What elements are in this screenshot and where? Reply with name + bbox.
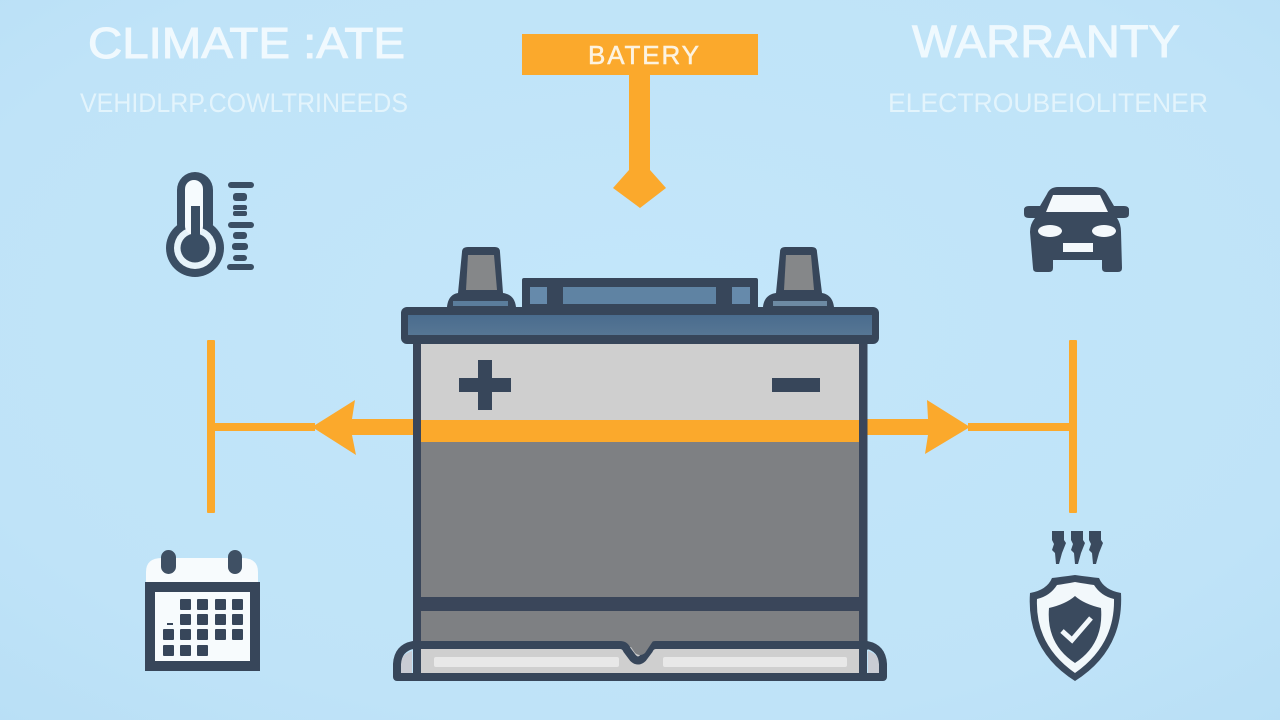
right connector arrow: [865, 340, 1077, 513]
banner label: BATERY: [588, 40, 699, 70]
calendar day grid: [163, 599, 243, 656]
horizontal body bar: [413, 597, 867, 611]
base light strip: [421, 647, 859, 675]
notch fill: [627, 641, 653, 655]
subheading: right: ELECTROUBEIOLITENER: [888, 88, 1208, 118]
battery body lower panel: [417, 442, 863, 647]
base side wedges: [401, 651, 412, 673]
heading: warranty: WARRANTY: [912, 16, 1180, 67]
battery illustration: [397, 247, 883, 677]
left connector arrow: [207, 340, 414, 513]
battery base: [397, 641, 883, 677]
icon: car: [1024, 187, 1129, 272]
check mark: [1062, 618, 1091, 640]
icon: shield with check: [1030, 575, 1121, 681]
battery body side walls: [413, 340, 868, 650]
base inner posts: [413, 645, 421, 677]
subheading: left: VEHIDLRP.COWLTRINEEDS: [80, 88, 408, 118]
right terminal: [763, 247, 834, 307]
icon: calendar: [146, 550, 258, 666]
banner bar: [522, 34, 758, 75]
top centre cap: [522, 278, 758, 310]
down arrow: [613, 75, 666, 208]
icon: thermometer: [166, 172, 254, 277]
base white strips: [434, 657, 619, 667]
left terminal: [447, 247, 516, 307]
orange band: [417, 420, 863, 442]
base outline: [397, 645, 883, 677]
temperature scale ticks: [227, 182, 254, 270]
battery lid: [401, 307, 879, 344]
battery body upper panel: [417, 340, 863, 422]
plus sign: [459, 360, 511, 410]
icon: lightning bolts: [1052, 531, 1103, 564]
heading: climate: CLIMATE :ATE: [88, 19, 405, 68]
top banner with down arrow: [522, 34, 758, 208]
minus sign: [772, 378, 820, 392]
